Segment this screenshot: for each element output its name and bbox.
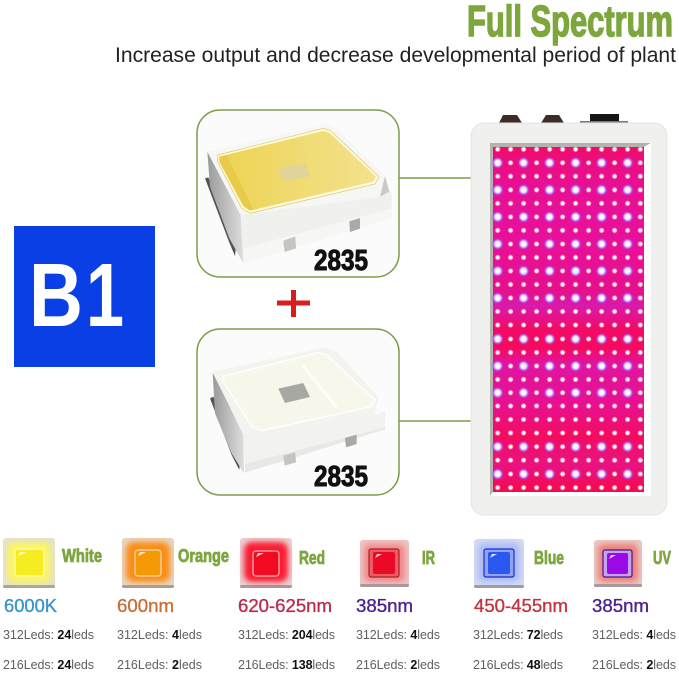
icon: white chip (210, 347, 385, 473)
counts: 312Leds: 72leds (473, 628, 563, 642)
counts: 312Leds: 4leds (356, 628, 440, 642)
badge: B1: B (29, 246, 83, 346)
light field (493, 147, 644, 492)
label: White (62, 546, 102, 566)
counts: 312Leds: 4leds (592, 628, 676, 642)
value: 450-455nm (474, 596, 568, 616)
legend: UV (592, 540, 676, 672)
icon: yellow chip (205, 124, 392, 263)
legend: orange (117, 538, 229, 672)
value: 600nm (117, 596, 174, 616)
legend: red (238, 538, 335, 672)
value: 620-625nm (238, 596, 332, 616)
icon: orange LED (122, 538, 174, 588)
icon: red LED (240, 538, 292, 588)
connectors (499, 114, 628, 123)
icon: plus (277, 290, 310, 317)
icon: UV LED (594, 540, 642, 587)
legend: UV: 216Leds: 2leds (592, 658, 676, 672)
housing (471, 123, 667, 515)
label: 2835: 2835 (314, 245, 368, 277)
badge: B1 (14, 226, 155, 367)
legend: blue (473, 539, 568, 672)
label: UV (653, 548, 671, 568)
value: 6000K (4, 596, 57, 616)
value: 385nm (356, 596, 413, 616)
LED dots (492, 146, 644, 491)
legend: IR: 216Leds: 2leds (356, 658, 440, 672)
label: IR (422, 548, 435, 568)
value: 385nm (592, 596, 649, 616)
legend: white: 216Leds: 24leds (3, 658, 94, 672)
legend: blue: 216Leds: 48leds (473, 658, 563, 672)
panel: yellow 2835 chip (197, 110, 399, 277)
panel: LED grow light (471, 114, 667, 515)
panel: white 2835 chip (197, 329, 399, 495)
legend: red: 216Leds: 138leds (238, 658, 335, 672)
label: 2835: 2835 (314, 461, 368, 493)
legend: IR (356, 540, 440, 672)
badge: B1: 1 (86, 246, 124, 346)
label: Red (299, 548, 325, 568)
icon: white LED (3, 538, 55, 588)
icon: IR LED (360, 540, 409, 587)
counts: 312Leds: 4leds (117, 628, 202, 642)
label: Blue (534, 548, 564, 568)
legend: white (3, 538, 102, 672)
connector: bottom chip to panel (399, 420, 493, 422)
connector: top chip to panel (399, 177, 478, 179)
icon: blue LED (474, 539, 524, 588)
subtitle: Increase output and decrease developmental period of plant (115, 44, 676, 67)
bevel (490, 143, 651, 496)
counts: 312Leds: 204leds (238, 628, 335, 642)
legend: orange: 216Leds: 2leds (117, 658, 202, 672)
counts: 312Leds: 24leds (3, 628, 94, 642)
label: Orange (178, 546, 229, 566)
